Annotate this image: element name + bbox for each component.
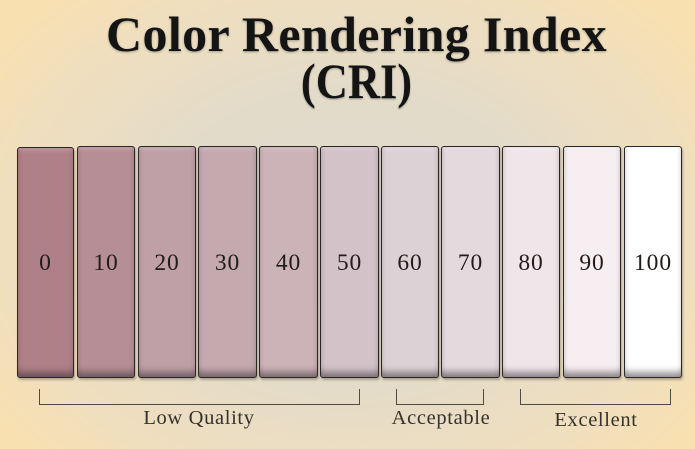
bar: CRI 50: 50 <box>337 250 362 276</box>
bar: CRI 30: 30 <box>215 250 240 276</box>
bracket: low quality <box>39 389 360 405</box>
bar: CRI 90 <box>563 146 621 378</box>
title: (CRI) <box>301 53 412 109</box>
bracket: excellent <box>520 389 671 405</box>
label: excellent: Excellent <box>554 409 638 431</box>
bar: CRI 40 <box>259 146 318 378</box>
bar: CRI 60 <box>381 146 439 378</box>
bar: CRI 80 <box>502 146 560 378</box>
bar: CRI 50 <box>320 146 379 378</box>
bar: CRI 20: 20 <box>154 250 180 276</box>
title: Color Rendering Index <box>106 6 607 62</box>
bar: CRI 100: 100 <box>634 250 672 276</box>
bar: CRI 90: 90 <box>579 250 605 276</box>
bar: CRI 20 <box>138 146 196 378</box>
bar: CRI 100 <box>624 146 682 378</box>
bar: CRI 30 <box>198 146 257 378</box>
panel: CRI scale bars <box>16 146 684 382</box>
bar: CRI 80: 80 <box>518 250 544 276</box>
bar: CRI 40: 40 <box>276 250 301 276</box>
bar: CRI 0 <box>17 147 74 378</box>
label: acceptable: Acceptable <box>392 407 490 429</box>
bracket: acceptable <box>396 389 484 405</box>
bar: CRI 10 <box>77 146 135 378</box>
bar: CRI 60: 60 <box>397 250 423 276</box>
label: low quality: Low Quality <box>143 407 255 429</box>
bar: CRI 0: 0 <box>39 250 52 276</box>
bar: CRI 70 <box>441 146 500 378</box>
bar: CRI 10: 10 <box>93 250 119 276</box>
title <box>106 6 608 110</box>
bar: CRI 70: 70 <box>458 250 483 276</box>
